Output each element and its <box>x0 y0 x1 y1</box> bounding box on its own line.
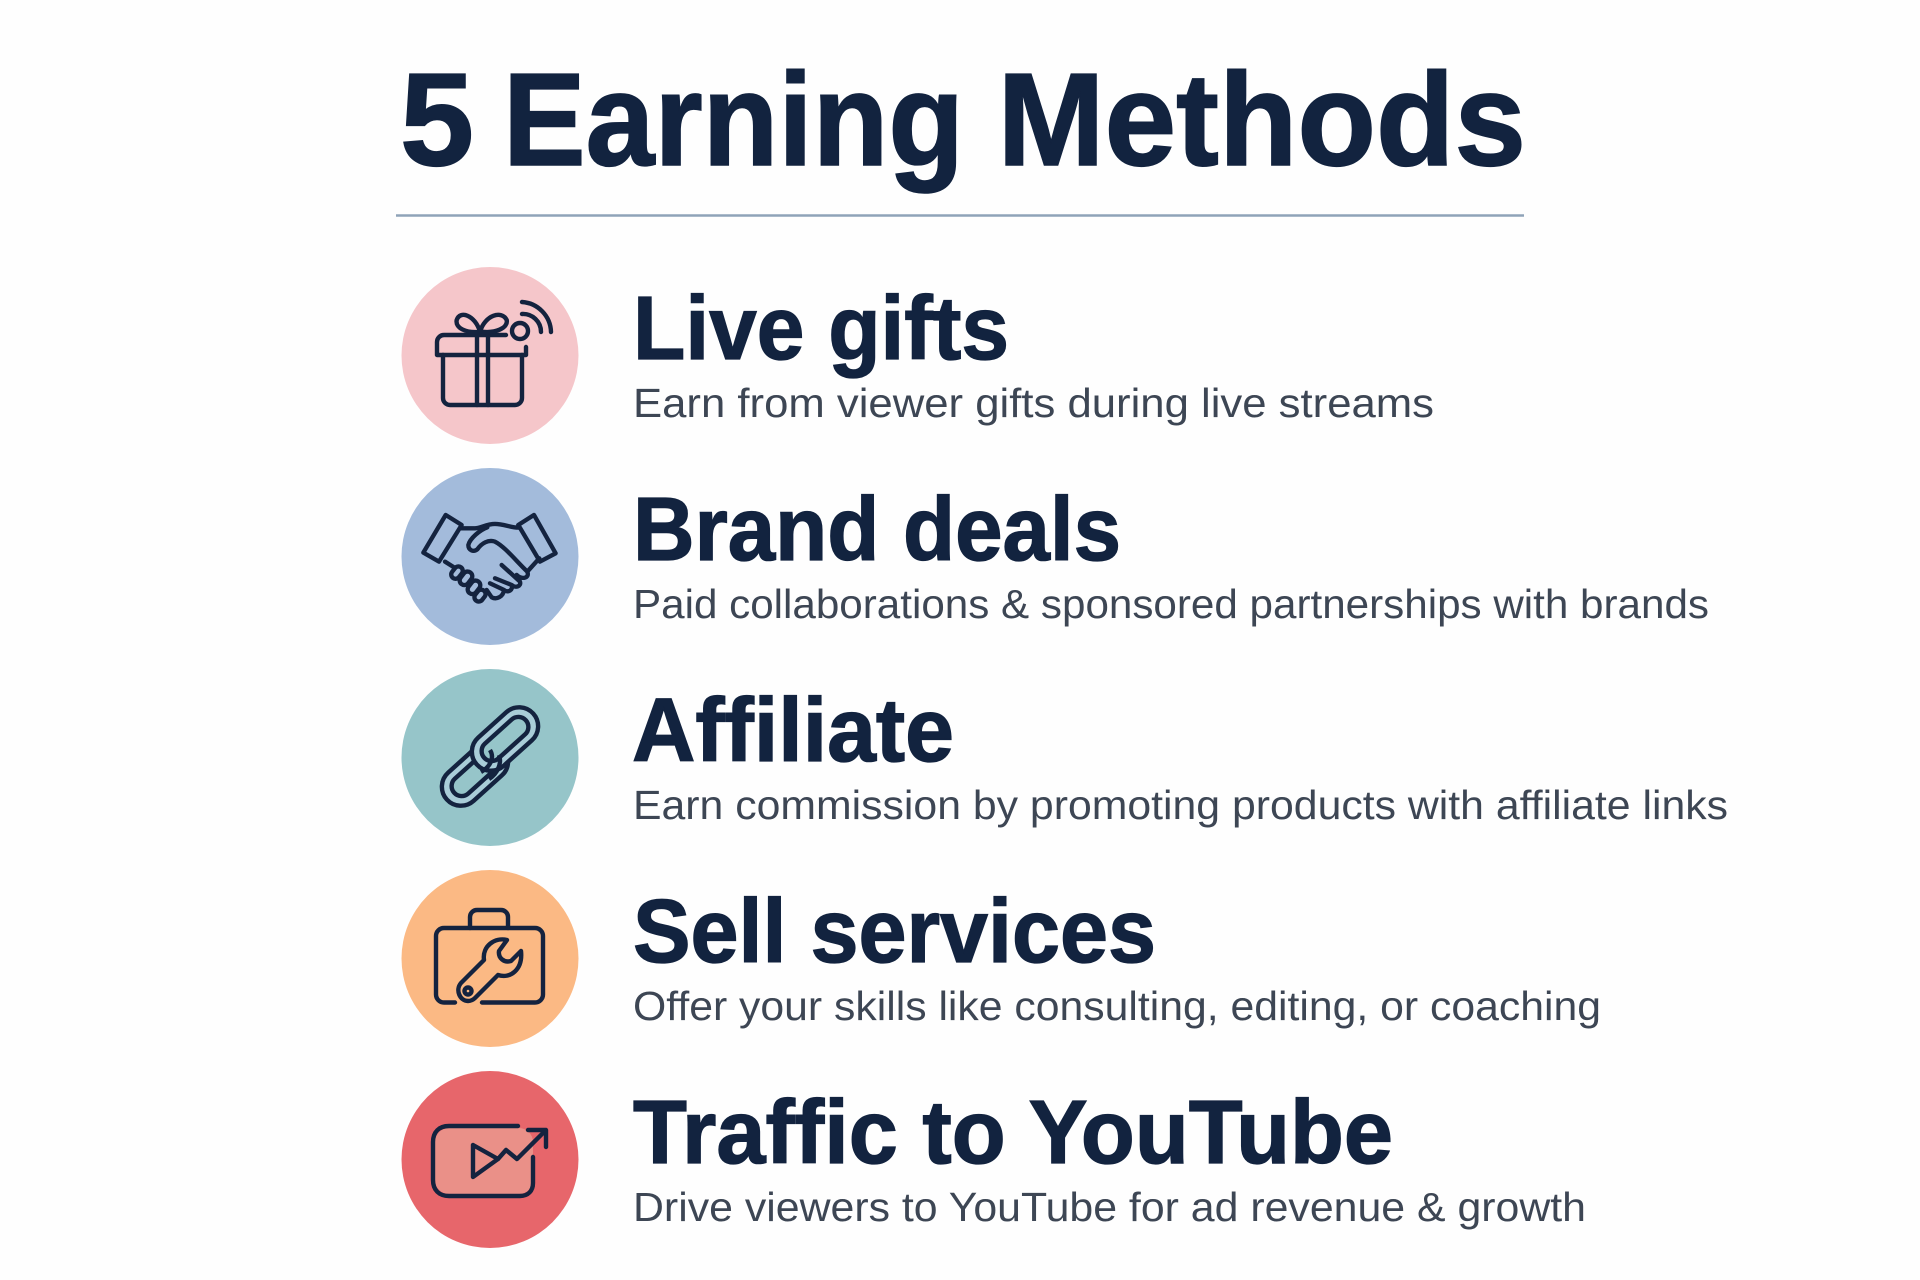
heading: sell services: Sell services <box>633 882 1156 982</box>
title <box>400 46 1526 193</box>
icon: video player with growth arrow <box>402 1071 578 1248</box>
heading: live gifts: Live gifts <box>633 279 1009 379</box>
icon: handshake <box>402 468 578 645</box>
icon: gift with live signal <box>402 267 578 444</box>
row: brand deals <box>402 468 1709 645</box>
description: sell services: Offer your skills like consulting, editing, or coaching <box>633 983 1601 1029</box>
title: Earning <box>503 46 964 193</box>
description: brand deals: Paid collaborations & sponsored partnerships with brands <box>633 581 1709 627</box>
row: affiliate <box>402 669 1728 846</box>
heading: affiliate: Affiliate <box>632 681 954 781</box>
description: traffic to youtube: Drive viewers to YouTube for ad revenue & growth <box>633 1184 1586 1230</box>
heading: traffic to youtube: Traffic to YouTube <box>633 1083 1393 1183</box>
row: live gifts <box>402 267 1434 444</box>
row: sell services <box>402 870 1601 1047</box>
title: Methods <box>998 46 1526 193</box>
title: 5 <box>400 46 474 193</box>
description: affiliate: Earn commission by promoting products with affiliate links <box>633 782 1728 828</box>
icon: chain link <box>402 669 578 846</box>
row: traffic to youtube <box>402 1071 1586 1248</box>
heading: brand deals: Brand deals <box>633 480 1121 580</box>
icon: briefcase with wrench <box>402 870 578 1047</box>
description: live gifts: Earn from viewer gifts during live streams <box>633 380 1434 426</box>
